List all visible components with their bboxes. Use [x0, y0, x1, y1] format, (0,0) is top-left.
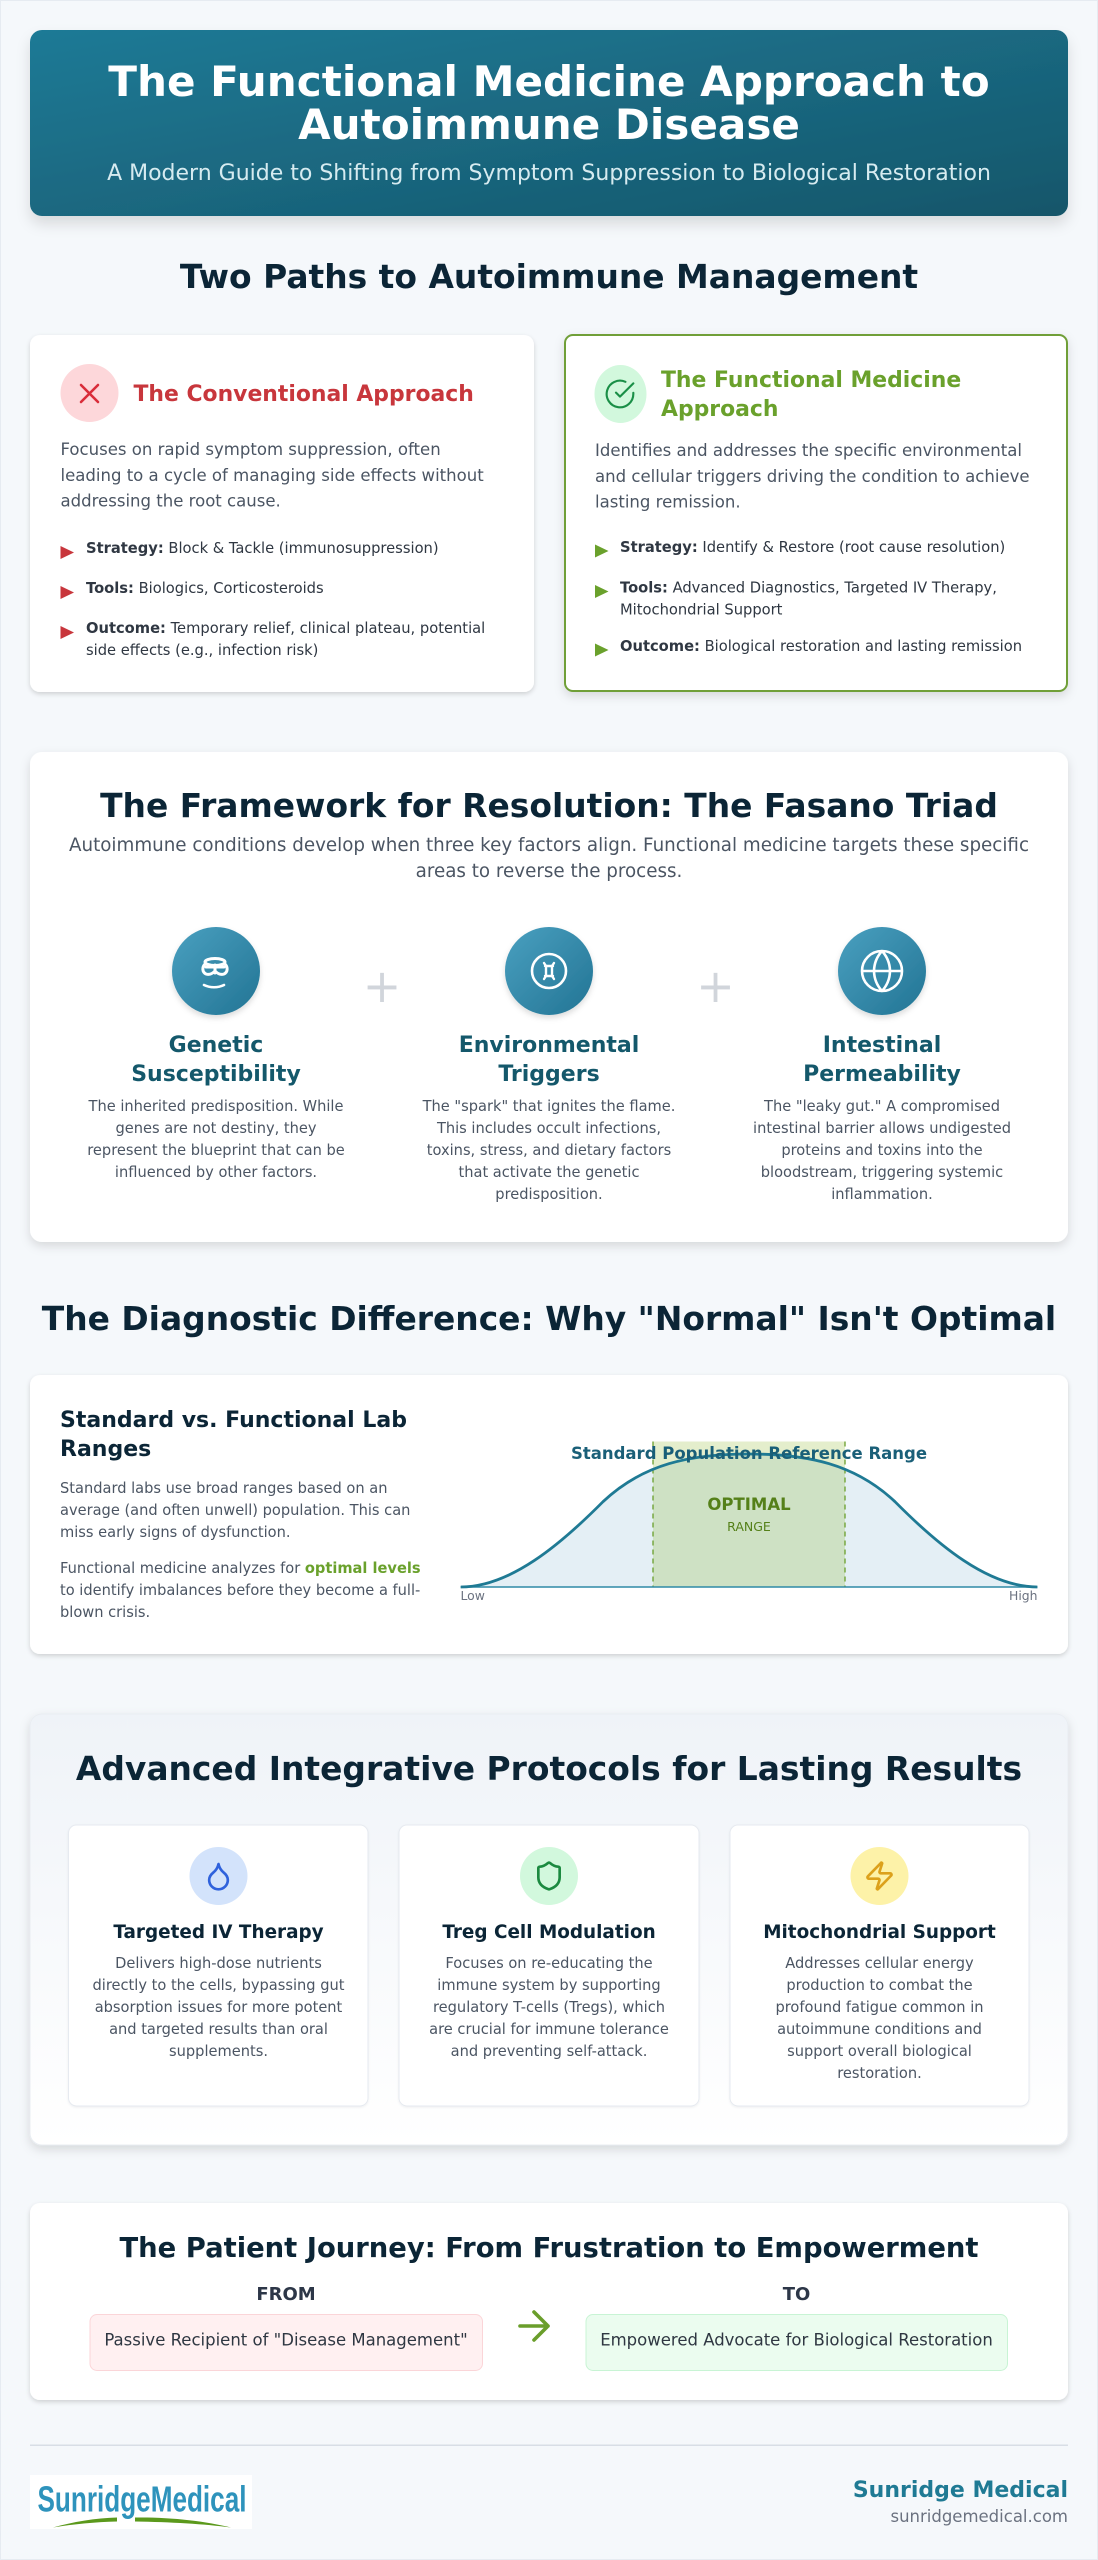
- panel: integrative protocols: [30, 1714, 1068, 2145]
- heading: two paths: Two Paths to Autoimmune Management: [180, 257, 918, 296]
- footer brand: Sunridge Medical: [853, 2478, 1068, 2503]
- to column: [586, 2284, 1008, 2370]
- environmental description: toxins, stress, and dietary factors: [427, 1142, 671, 1159]
- panel: lab ranges: [30, 1375, 1068, 1654]
- icon: environment: [505, 927, 593, 1015]
- lab text two: to identify imbalances before they become a full-: [60, 1582, 420, 1599]
- genetic description: represent the blueprint that can be: [87, 1142, 345, 1159]
- icon: check circle: [594, 365, 646, 423]
- chart: bell curve with optimal range: [460, 1442, 1038, 1603]
- lab heading: Standard vs. Functional Lab: [60, 1408, 407, 1433]
- mitochondrial description: autoimmune conditions and: [777, 2021, 982, 2038]
- heading: diagnostic difference: The Diagnostic Difference: Why "Normal" Isn't Optimal: [42, 1299, 1056, 1338]
- icon: shield: [520, 1847, 578, 1905]
- mitochondrial description: production to combat the: [786, 1977, 973, 1994]
- functional list: Strategy: Identify & Restore (root cause resolution): [620, 539, 1005, 556]
- conventional description: Focuses on rapid symptom suppression, often: [60, 440, 441, 459]
- conventional list: Strategy: Block & Tackle (immunosuppression): [86, 540, 439, 557]
- functional description: and cellular triggers driving the condition to achieve: [595, 467, 1030, 486]
- environmental description: The "spark" that ignites the flame.: [423, 1098, 675, 1115]
- from column: [90, 2284, 482, 2370]
- conventional list: Outcome: Temporary relief, clinical plateau, potential: [86, 620, 485, 637]
- conventional list: Tools: Biologics, Corticosteroids: [86, 580, 324, 597]
- subtitle: A Modern Guide to Shifting from Symptom Suppression to Biological Restoration: [107, 161, 991, 186]
- protocols heading: Advanced Integrative Protocols for Lasting Results: [76, 1749, 1022, 1788]
- plus sign: +: [696, 959, 735, 1013]
- functional list: Outcome: Biological restoration and lasting remission: [620, 638, 1022, 655]
- genetic description: The inherited predisposition. While: [89, 1098, 343, 1115]
- fasano intro: Autoimmune conditions develop when three key factors align. Functional medicine targets these specific: [69, 835, 1029, 856]
- logo: [30, 2475, 252, 2529]
- fasano heading: The Framework for Resolution: The Fasano Triad: [100, 786, 998, 825]
- card: treg cell modulation: [399, 1825, 699, 2106]
- panel: conventional approach: [30, 335, 534, 692]
- column: environmental triggers: [422, 927, 675, 1203]
- panel: patient journey: [30, 2203, 1068, 2400]
- environmental description: that activate the genetic: [458, 1164, 640, 1181]
- genetic heading: Genetic: [169, 1033, 263, 1058]
- intestinal description: bloodstream, triggering systemic: [761, 1164, 1003, 1181]
- mitochondrial heading: Mitochondrial Support: [763, 1922, 996, 1943]
- arrow: [520, 2312, 548, 2340]
- genetic description: genes are not destiny, they: [115, 1120, 317, 1137]
- mitochondrial description: support overall biological: [787, 2043, 972, 2060]
- functional heading: The Functional Medicine: [661, 368, 961, 393]
- iv description: directly to the cells, bypassing gut: [93, 1977, 345, 1994]
- functional list: Mitochondrial Support: [620, 602, 783, 618]
- functional list: [595, 539, 1022, 656]
- to column: Empowered Advocate for Biological Restoration: [600, 2330, 993, 2350]
- functional heading: Approach: [661, 397, 778, 422]
- functional description: Identifies and addresses the specific environmental: [595, 441, 1022, 460]
- conventional list: side effects (e.g., infection risk): [86, 642, 318, 659]
- genetic heading: Susceptibility: [131, 1062, 301, 1087]
- panel: fasano triad: [30, 752, 1068, 1242]
- environmental heading: Environmental: [459, 1033, 639, 1058]
- lab text two: Functional medicine analyzes for optimal levels: [60, 1560, 421, 1577]
- intestinal description: intestinal barrier allows undigested: [753, 1120, 1011, 1137]
- footer brand: sunridgemedical.com: [890, 2507, 1068, 2526]
- icon: droplet: [190, 1847, 248, 1905]
- header banner: [30, 30, 1068, 216]
- from column: Passive Recipient of "Disease Management": [104, 2330, 468, 2350]
- journey heading: The Patient Journey: From Frustration to Empowerment: [119, 2233, 979, 2264]
- fasano intro: areas to reverse the process.: [416, 861, 682, 882]
- column: intestinal permeability: [753, 927, 1011, 1203]
- genetic description: influenced by other factors.: [115, 1164, 317, 1181]
- icon: genetics: [172, 927, 260, 1015]
- footer divider: [30, 2444, 1068, 2446]
- high label: High: [1009, 1588, 1038, 1603]
- lab heading: Ranges: [60, 1437, 151, 1462]
- logo: SunridgeMedical: [38, 2478, 246, 2520]
- treg description: immune system by supporting: [437, 1977, 661, 1994]
- conventional description: leading to a cycle of managing side effects without: [60, 466, 484, 485]
- treg description: regulatory T-cells (Tregs), which: [433, 1999, 665, 2016]
- card: targeted iv therapy: [68, 1825, 368, 2106]
- treg description: are crucial for immune tolerance: [429, 2021, 669, 2038]
- column: genetic susceptibility: [87, 927, 345, 1181]
- mitochondrial description: restoration.: [837, 2065, 922, 2082]
- card: mitochondrial support: [730, 1825, 1029, 2106]
- lab text one: miss early signs of dysfunction.: [60, 1524, 290, 1541]
- mitochondrial description: Addresses cellular energy: [785, 1955, 974, 1972]
- conventional list: [60, 540, 485, 659]
- from column: FROM: [256, 2284, 316, 2305]
- conventional heading: The Conventional Approach: [134, 382, 474, 407]
- environmental description: This includes occult infections,: [436, 1120, 661, 1137]
- iv description: absorption issues for more potent: [95, 1999, 343, 2016]
- plus sign: +: [363, 959, 401, 1013]
- optimal label: OPTIMAL: [707, 1495, 791, 1514]
- iv description: and targeted results than oral: [109, 2021, 328, 2038]
- title: The Functional Medicine Approach to: [108, 57, 990, 106]
- lab text one: Standard labs use broad ranges based on an: [60, 1480, 387, 1497]
- low label: Low: [460, 1588, 485, 1603]
- to column: TO: [783, 2284, 810, 2305]
- conventional description: addressing the root cause.: [60, 492, 281, 510]
- treg description: Focuses on re-educating the: [445, 1955, 653, 1972]
- functional list: Tools: Advanced Diagnostics, Targeted IV Therapy,: [620, 580, 997, 596]
- iv description: Delivers high-dose nutrients: [115, 1955, 322, 1972]
- range label: RANGE: [727, 1519, 771, 1534]
- panel: functional approach: [565, 335, 1067, 691]
- chart title: Standard Population Reference Range: [571, 1444, 927, 1463]
- intestinal description: proteins and toxins into the: [781, 1142, 983, 1159]
- icon: lightning bolt: [850, 1847, 908, 1905]
- title: Autoimmune Disease: [298, 100, 800, 149]
- intestinal description: The "leaky gut." A compromised: [764, 1098, 1000, 1115]
- functional description: lasting remission.: [595, 492, 741, 512]
- footer brand: [853, 2478, 1068, 2526]
- environmental heading: Triggers: [498, 1062, 600, 1087]
- treg heading: Treg Cell Modulation: [442, 1922, 656, 1943]
- icon: globe: [838, 927, 926, 1015]
- lab text one: average (and often unwell) population. This can: [60, 1502, 410, 1519]
- treg description: and preventing self-attack.: [451, 2043, 647, 2060]
- icon: x mark: [60, 364, 118, 422]
- intestinal heading: Permeability: [803, 1062, 961, 1087]
- lab text two: blown crisis.: [60, 1604, 150, 1621]
- intestinal description: inflammation.: [831, 1186, 933, 1203]
- iv description: supplements.: [169, 2043, 268, 2060]
- mitochondrial description: profound fatigue common in: [775, 1999, 984, 2016]
- iv heading: Targeted IV Therapy: [113, 1922, 324, 1943]
- intestinal heading: Intestinal: [823, 1033, 941, 1058]
- environmental description: predisposition.: [495, 1186, 603, 1203]
